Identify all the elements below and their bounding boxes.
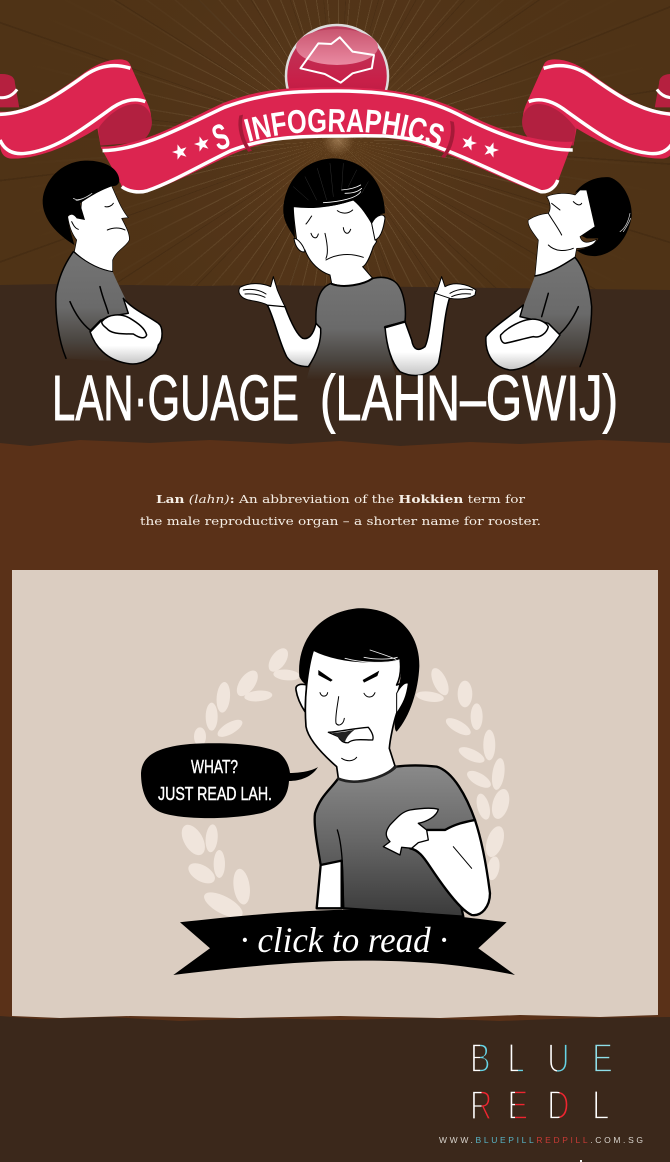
left arm bbox=[267, 305, 321, 367]
definition text bbox=[140, 492, 541, 528]
star bbox=[170, 142, 189, 161]
open mouth bbox=[328, 727, 373, 743]
title bbox=[52, 362, 618, 434]
dark band behind title bbox=[0, 284, 670, 446]
logo word red: REDL bbox=[470, 1082, 609, 1128]
click to read ribbon bbox=[173, 910, 515, 975]
definition line 2: the male reproductive organ – a shorter name for rooster. bbox=[140, 514, 541, 528]
shirt bbox=[520, 257, 592, 370]
brows bbox=[318, 670, 379, 683]
right arm bbox=[410, 820, 490, 915]
ribbon label: · click to read · bbox=[240, 920, 448, 960]
title word: language: LAN·GUAGE bbox=[52, 362, 299, 434]
star bbox=[192, 134, 211, 153]
ribbon banner bbox=[0, 59, 670, 194]
face bbox=[293, 200, 377, 286]
ribbon open paren: ( bbox=[233, 109, 253, 154]
figure: pointing man bbox=[296, 608, 490, 917]
hair bbox=[299, 608, 419, 732]
footer speck bbox=[580, 1160, 582, 1162]
figure: left man arms crossed bbox=[43, 161, 162, 364]
right arm bbox=[385, 292, 450, 375]
ribbon letter S: S bbox=[207, 117, 235, 159]
hair bbox=[43, 161, 119, 245]
arm bbox=[486, 305, 560, 370]
logo url: WWW. BLUEPILL REDPILL .COM.SG bbox=[439, 1135, 643, 1145]
panel: click to read card bbox=[12, 570, 658, 1018]
speech line 1: WHAT? bbox=[191, 757, 238, 777]
figure: centre man shrugging bbox=[239, 158, 476, 380]
ribbon title: INFOGRAPHICS bbox=[244, 108, 444, 146]
ribbon arc guide bbox=[248, 132, 440, 149]
eyes nose chin bbox=[320, 693, 375, 761]
pointing hand bbox=[383, 808, 438, 855]
shirt bbox=[56, 252, 140, 363]
hand bbox=[501, 319, 548, 343]
left ear bbox=[294, 238, 305, 252]
face details bbox=[306, 210, 363, 260]
face and neck bbox=[528, 190, 597, 276]
star bbox=[460, 133, 479, 152]
ribbon close paren: ) bbox=[441, 115, 460, 160]
back arm and forearm bbox=[90, 298, 162, 364]
left ear bbox=[296, 684, 307, 712]
figure: right man looking up bbox=[486, 177, 632, 370]
wreath bbox=[177, 645, 512, 923]
speech line 2: JUST READ LAH. bbox=[158, 784, 272, 804]
star bbox=[482, 140, 501, 159]
hair bbox=[575, 177, 632, 256]
face and neck bbox=[305, 650, 405, 781]
background rays bbox=[0, 0, 670, 300]
hair bbox=[283, 158, 385, 238]
left arm bbox=[317, 861, 342, 908]
right hand bbox=[435, 277, 476, 299]
globe badge bbox=[286, 25, 388, 127]
left hand bbox=[239, 277, 285, 307]
right ear bbox=[372, 215, 385, 240]
right ear bbox=[397, 683, 408, 713]
icon: Singapore outline bbox=[300, 37, 374, 83]
shirt bbox=[307, 277, 405, 380]
shirt bbox=[315, 765, 475, 917]
footer band bbox=[0, 1016, 670, 1162]
definition line 1: Lan (lahn) : An abbreviation of the Hokkien term for bbox=[156, 492, 526, 506]
face and neck bbox=[68, 186, 129, 272]
hand bbox=[102, 315, 147, 338]
ribbon right flap bbox=[522, 59, 670, 159]
ribbon centre bbox=[100, 87, 573, 193]
logo bbox=[439, 1035, 643, 1162]
speech bubble bbox=[141, 743, 318, 818]
logo word blue: BLUE bbox=[470, 1035, 613, 1081]
ribbon left flap bbox=[0, 59, 152, 159]
